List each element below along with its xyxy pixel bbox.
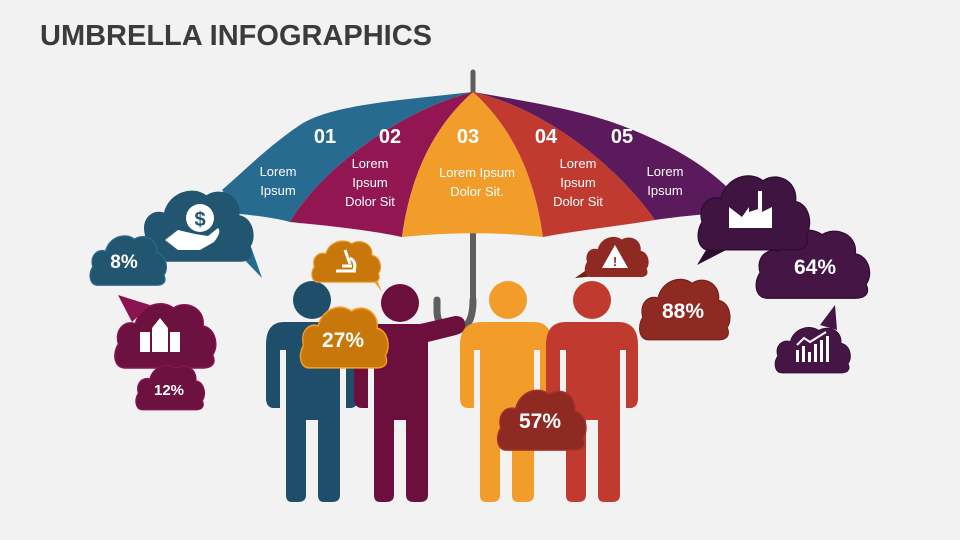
umbrella canopy [222,92,730,237]
cloud: dollar icon: $ [194,209,206,231]
panel 02 [290,92,473,237]
umbrella labels: Lorem [260,164,296,179]
cloud: 57%: 57% [519,410,561,433]
umbrella labels: Dolor Sit [345,194,395,209]
person magenta [354,284,465,502]
cloud: 88%: 88% [662,300,704,323]
cloud: 27% [300,307,388,368]
cloud: 27%: 27% [322,329,364,352]
panel 03 [402,92,543,237]
person blue [266,281,358,502]
cloud: warning icon: ! [613,254,617,269]
cloud: 12% [136,365,205,410]
umbrella labels [260,126,683,209]
cloud: 64%: 64% [794,256,836,279]
umbrella labels: Ipsum [352,175,388,190]
cloud: 57% [497,390,586,450]
cloud: 88% [639,279,730,340]
cloud: microscope icon [312,241,382,292]
title: UMBRELLA INFOGRAPHICS [40,20,432,52]
umbrella labels: 04 [535,126,558,148]
umbrella labels: Dolor Sit. [450,184,504,199]
person red [546,281,638,502]
cloud: envelope chart icon [697,176,810,265]
cloud: 8% [90,236,166,285]
umbrella labels: 03 [457,126,479,148]
umbrella labels: 02 [379,126,401,148]
cloud: school icon [115,295,216,368]
cloud: dollar icon [141,191,262,278]
umbrella labels: Lorem [560,156,596,171]
person orange [460,281,552,502]
umbrella shaft [437,72,473,330]
umbrella labels: Ipsum [260,183,296,198]
umbrella labels: Ipsum [560,175,596,190]
umbrella labels: Lorem [647,164,683,179]
umbrella labels: Lorem [352,156,388,171]
cloud: growth chart icon [775,305,850,373]
cloud: 64% [756,230,870,298]
cloud: 8%: 8% [110,252,138,273]
cloud: warning icon [575,237,649,278]
umbrella labels: Dolor Sit [553,194,603,209]
panel 04 [473,92,655,237]
umbrella labels: Lorem Ipsum [439,165,515,180]
umbrella labels: Ipsum [647,183,683,198]
umbrella labels: 01 [314,126,336,148]
panel 01 [222,92,473,222]
panel 05 [473,92,730,220]
umbrella labels: 05 [611,126,633,148]
cloud: 12%: 12% [154,382,184,399]
